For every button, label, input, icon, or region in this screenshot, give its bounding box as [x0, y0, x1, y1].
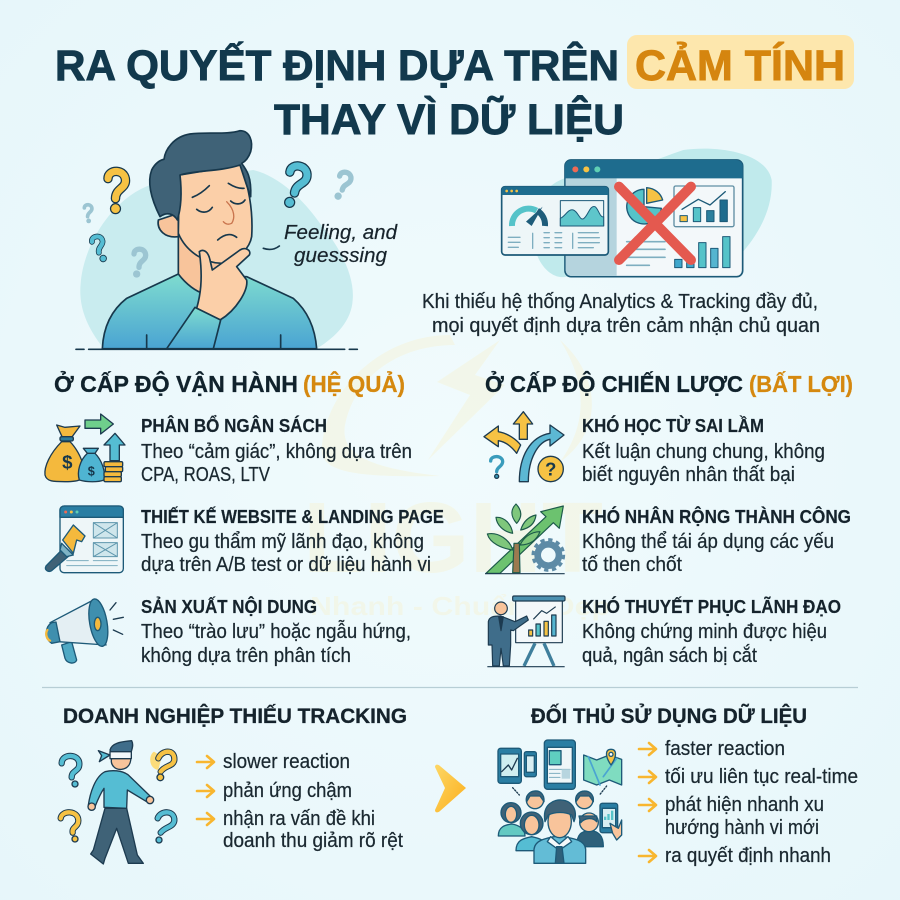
list: consequences of slow reaction: slower reaction — [223, 750, 350, 773]
watermark logo: LIGHT — [303, 482, 603, 594]
caption: feeling and guessing — [284, 221, 398, 267]
list: advantages of fast reaction: faster reaction — [665, 737, 785, 760]
list: advantages of fast reaction: hướng hành vi mới — [665, 816, 819, 839]
text: content production: Theo “trào lưu” hoặc ngẫu hứng, — [141, 620, 411, 643]
list: advantages of fast reaction — [639, 737, 858, 867]
illustration: crossed-out analytics dashboards — [502, 149, 772, 277]
text: convincing leaders: Không chứng minh được hiệu — [582, 620, 827, 643]
text: learning from mistakes: Kết luận chung chung, không — [582, 440, 825, 463]
text: replicating success: Không thể tái áp dụng các yếu — [582, 530, 834, 553]
heading: competitors using data: ĐỐI THỦ SỬ DỤNG DỮ LIỆU — [531, 704, 807, 728]
title: CẢM TÍNH — [635, 41, 845, 90]
list: consequences of slow reaction — [197, 750, 403, 852]
text: budget — [141, 415, 412, 486]
caption: missing analytics: Khi thiếu hệ thống Analytics & Tracking đầy đủ, — [422, 290, 818, 313]
list: consequences of slow reaction: phản ứng chậm — [223, 779, 352, 802]
panel: strategic level — [484, 369, 853, 667]
item: convincing leaders — [487, 596, 841, 667]
heading: business without tracking: DOANH NGHIỆP THIẾU TRACKING — [63, 704, 407, 728]
text: replicating success: KHÓ NHÂN RỘNG THÀNH CÔNG — [582, 506, 851, 527]
watermark logo — [303, 335, 610, 621]
title — [55, 35, 854, 144]
text: website design: Theo gu thẩm mỹ lãnh đạo, không — [141, 530, 424, 553]
heading: strategic level: (BẤT LỢI) — [749, 370, 853, 397]
icon: megaphone — [46, 598, 123, 663]
caption: feeling and guessing: Feeling, and — [284, 221, 398, 244]
caption: missing analytics: mọi quyết định dựa trên cảm nhận chủ quan — [432, 314, 820, 337]
title: RA QUYẾT ĐỊNH DỰA TRÊN — [55, 41, 619, 90]
panel: operational level — [45, 369, 444, 667]
text: convincing leaders: KHÓ THUYẾT PHỤC LÃNH ĐẠO — [582, 596, 841, 617]
text: content production: SẢN XUẤT NỘI DUNG — [141, 596, 317, 617]
list: advantages of fast reaction: ra quyết định nhanh — [665, 844, 831, 867]
text: learning from mistakes: KHÓ HỌC TỪ SAI LẦM — [582, 415, 764, 436]
icon: money bags: $ — [62, 451, 73, 472]
panel: competitors using data — [498, 704, 858, 867]
panel: business without tracking — [61, 704, 407, 864]
title highlight box — [627, 35, 854, 89]
text: content production — [141, 596, 411, 667]
heading: operational level: (HỆ QUẢ) — [303, 369, 405, 397]
icon: forked arrows — [484, 412, 564, 482]
icon: money bags — [45, 414, 125, 482]
list: advantages of fast reaction: phát hiện nhanh xu — [665, 793, 824, 816]
illustration: thinking man — [76, 131, 357, 349]
item: learning from mistakes — [484, 412, 825, 486]
text: replicating success: tố then chốt — [582, 553, 682, 576]
icon: website and brush — [45, 506, 123, 573]
caption: feeling and guessing: guesssing — [294, 244, 388, 267]
icon: blindfolded man among question marks — [61, 741, 174, 864]
icon: forked arrows: ? — [545, 458, 556, 479]
text: convincing leaders: quả, ngân sách bị cắt — [582, 644, 757, 667]
list: consequences of slow reaction: doanh thu giảm rõ rệt — [223, 829, 403, 852]
text: budget: CPA, ROAS, LTV — [141, 463, 270, 486]
icon: money bags: $ — [88, 464, 95, 478]
text: learning from mistakes: biết nguyên nhân thất bại — [582, 463, 795, 486]
icon: presenter at board — [487, 596, 565, 667]
text: replicating success — [582, 506, 851, 576]
text: website design: dựa trên A/B test or dữ liệu hành vi — [141, 553, 431, 576]
text: convincing leaders — [582, 596, 841, 667]
list: advantages of fast reaction: tối ưu liên tục real-time — [665, 765, 858, 788]
title: THAY VÌ DỮ LIỆU — [274, 95, 624, 144]
caption: missing analytics — [422, 290, 820, 337]
text: content production: không dựa trên phân tích — [141, 644, 351, 667]
item: budget — [45, 414, 412, 486]
item: website design — [45, 506, 444, 576]
icon: plant, growth arrow and gear — [485, 504, 565, 574]
watermark logo: Nhanh - Chuẩn - Đẹp — [310, 591, 610, 621]
question marks — [84, 165, 352, 278]
list: consequences of slow reaction: nhận ra vấn đề khi — [223, 807, 375, 830]
arrow: comparison chevron — [435, 765, 466, 812]
text: learning from mistakes — [582, 415, 825, 486]
item: content production — [46, 596, 411, 667]
text: budget: Theo “cảm giác”, không dựa trên — [141, 440, 412, 463]
heading: operational level: Ở CẤP ĐỘ VẬN HÀNH — [54, 369, 298, 397]
text: website design: THIẾT KẾ WEBSITE & LANDING PAGE — [141, 506, 444, 527]
text: budget: PHÂN BỔ NGÂN SÁCH — [141, 415, 327, 436]
icon: team with devices — [498, 740, 622, 863]
item: replicating success — [485, 504, 851, 576]
text: website design — [141, 506, 444, 576]
heading: strategic level: Ở CẤP ĐỘ CHIẾN LƯỢC — [485, 369, 743, 397]
